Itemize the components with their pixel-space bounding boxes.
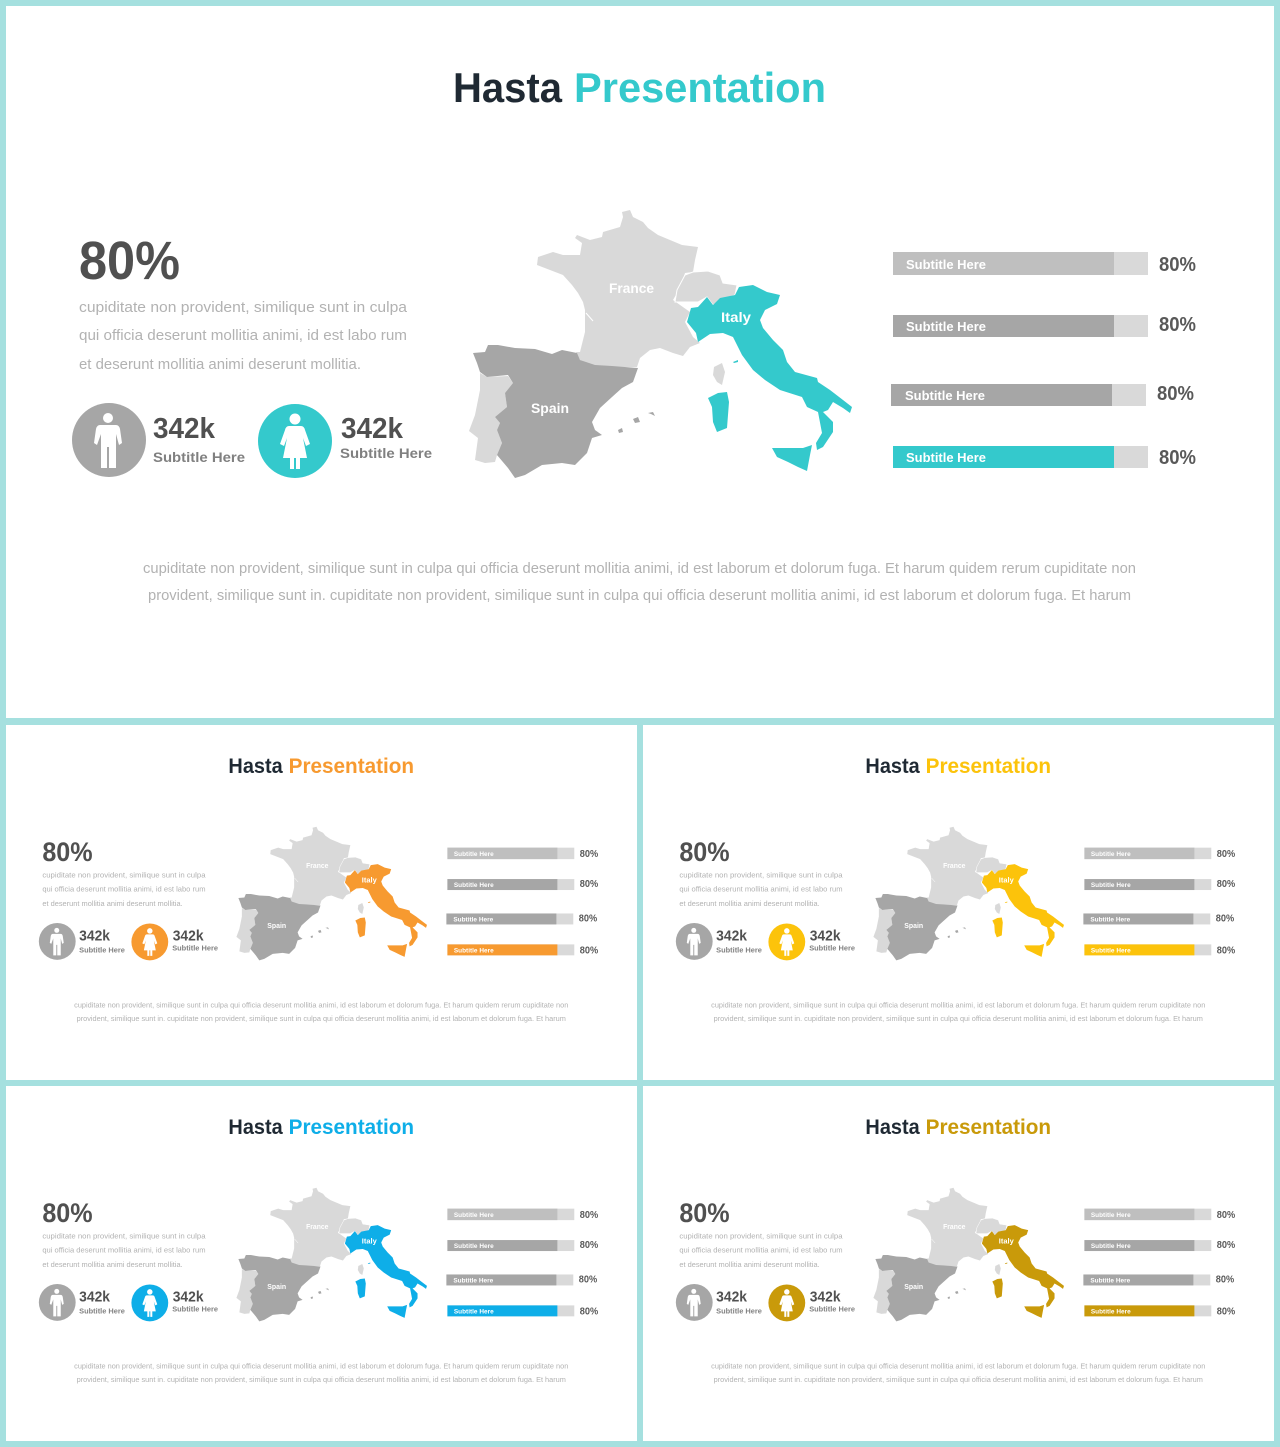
text block: intro: et deserunt mollitia animi deserunt mollitia. [79, 356, 361, 373]
stat: male: Subtitle Here [153, 449, 245, 465]
bar 1: Subtitle Here [454, 1212, 494, 1219]
map: France Spain Italy: Italy [362, 1239, 377, 1246]
map: France Spain Italy: Spain [267, 1284, 286, 1291]
map: France Spain Italy: Italy [999, 1239, 1014, 1246]
text block: intro: qui officia deserunt mollitia animi, id est labo rum [42, 1246, 206, 1255]
bar 4: Subtitle Here [454, 1308, 494, 1315]
stat: male: Subtitle Here [79, 947, 125, 954]
stat: male: 342k [79, 1289, 111, 1305]
bar 4: Subtitle Here [454, 947, 494, 954]
stat: male: 342k [716, 928, 748, 944]
bar 4: 80% [580, 1306, 598, 1317]
stat: male [39, 1284, 125, 1321]
bar 2: Subtitle Here [1091, 882, 1131, 889]
stat: female: 342k [173, 928, 204, 944]
text block: footer [143, 560, 1136, 604]
panel: blue slide [6, 1086, 637, 1441]
bar 4: 80% [1217, 945, 1235, 956]
map: France Spain Italy: Spain [904, 1284, 923, 1291]
stat: female: Subtitle Here [809, 945, 855, 952]
bar 4 [1084, 944, 1235, 956]
bar 1: 80% [1217, 849, 1235, 860]
bar 1: Subtitle Here [1091, 1212, 1131, 1219]
text block: footer: cupiditate non provident, similique sunt in culpa qui officia deserunt mollitia animi, id est laborum et dolorum fuga. Et harum quidem rerum cupiditate non [143, 560, 1136, 577]
title: Hasta [228, 1116, 283, 1139]
stat: female [768, 923, 855, 960]
text block: intro [42, 871, 206, 908]
text block: intro: et deserunt mollitia animi deserunt mollitia. [679, 899, 820, 908]
text block: intro: et deserunt mollitia animi deserunt mollitia. [679, 1260, 820, 1269]
map: France Spain Italy [236, 1188, 427, 1321]
bar 1 [1084, 848, 1235, 860]
stat: male [676, 923, 762, 960]
title [228, 1116, 414, 1139]
title: Presentation [926, 1116, 1051, 1139]
bar 2 [1084, 1240, 1235, 1251]
stat: female: 342k [810, 1289, 841, 1305]
bar 3: 80% [1216, 913, 1234, 924]
stat: male: 342k [716, 1289, 748, 1305]
stat: female: Subtitle Here [340, 445, 432, 461]
text block: intro [79, 299, 408, 373]
map: France Spain Italy: Spain [267, 923, 286, 930]
bar 2: Subtitle Here [454, 1243, 494, 1250]
big percentage: 80% [679, 1198, 730, 1228]
bar 4: 80% [1217, 1306, 1235, 1317]
bar 3: Subtitle Here [453, 1277, 494, 1284]
title: Presentation [574, 64, 826, 111]
title: Hasta [865, 755, 920, 778]
bar 2: 80% [1217, 879, 1235, 890]
map: France Spain Italy: Spain [531, 400, 569, 416]
bar 1 [893, 252, 1196, 276]
panel: orange slide [6, 725, 637, 1080]
map: France Spain Italy: France [306, 863, 329, 870]
text block: footer: provident, similique sunt in. cupiditate non provident, similique sunt in culpa qui officia deserunt mollitia animi, id est laborum et dolorum fuga. Et harum [714, 1014, 1203, 1023]
text block: intro: qui officia deserunt mollitia animi, id est labo rum [679, 1246, 843, 1255]
bar 3 [891, 383, 1194, 406]
bar 2 [893, 314, 1196, 337]
map: France Spain Italy: Italy [721, 309, 751, 325]
bar 1: Subtitle Here [454, 851, 494, 858]
bar 2: 80% [580, 1240, 598, 1251]
text block: footer: provident, similique sunt in. cupiditate non provident, similique sunt in culpa qui officia deserunt mollitia animi, id est laborum et dolorum fuga. Et harum [77, 1375, 566, 1384]
panel: yellow slide [643, 725, 1274, 1080]
stat: female [258, 404, 432, 478]
big percentage: 80% [79, 231, 180, 291]
bar 3: 80% [579, 1274, 597, 1285]
bar 1: 80% [1217, 1210, 1235, 1221]
bar 4: 80% [1159, 447, 1196, 469]
bar 4 [447, 1305, 598, 1317]
stat: male: Subtitle Here [716, 947, 762, 954]
text block: intro: qui officia deserunt mollitia animi, id est labo rum [79, 327, 407, 344]
stat: female: 342k [341, 413, 404, 445]
stat: male [39, 923, 125, 960]
text block: intro [679, 1232, 843, 1269]
bar 2: 80% [1217, 1240, 1235, 1251]
map: France Spain Italy [236, 827, 427, 960]
bar 2 [1084, 879, 1235, 890]
text block: footer [711, 1362, 1205, 1384]
map: France Spain Italy: France [306, 1224, 329, 1231]
text block: intro: cupiditate non provident, similique sunt in culpa [42, 871, 206, 880]
bar 1: 80% [580, 1210, 598, 1221]
text block: footer [711, 1001, 1205, 1023]
text block: intro: cupiditate non provident, similique sunt in culpa [679, 871, 843, 880]
text block: footer: provident, similique sunt in. cupiditate non provident, similique sunt in culpa qui officia deserunt mollitia animi, id est laborum et dolorum fuga. Et harum [714, 1375, 1203, 1384]
text block: intro: qui officia deserunt mollitia animi, id est labo rum [42, 885, 206, 894]
big percentage: 80% [679, 837, 730, 867]
bar 4 [1084, 1305, 1235, 1317]
text block: footer [74, 1001, 568, 1023]
stat: female [768, 1284, 855, 1321]
bar 4: Subtitle Here [1091, 947, 1131, 954]
stat: female: Subtitle Here [172, 1306, 218, 1313]
bar 2: 80% [580, 879, 598, 890]
text block: footer: cupiditate non provident, similique sunt in culpa qui officia deserunt mollitia animi, id est laborum et dolorum fuga. Et harum quidem rerum cupiditate non [711, 1001, 1205, 1010]
big percentage: 80% [42, 1198, 93, 1228]
bar 1: Subtitle Here [1091, 851, 1131, 858]
title [228, 755, 414, 778]
bar 4: 80% [580, 945, 598, 956]
text block: intro: et deserunt mollitia animi deserunt mollitia. [42, 899, 183, 908]
bar 3: Subtitle Here [1090, 916, 1131, 923]
bar 3 [446, 913, 597, 924]
text block: footer: cupiditate non provident, similique sunt in culpa qui officia deserunt mollitia animi, id est laborum et dolorum fuga. Et harum quidem rerum cupiditate non [74, 1362, 568, 1371]
panel: gold slide [643, 1086, 1274, 1441]
bar 4 [447, 944, 598, 956]
bar 2: Subtitle Here [906, 319, 986, 334]
big percentage: 80% [42, 837, 93, 867]
bar 2 [447, 879, 598, 890]
bar 1 [1084, 1209, 1235, 1221]
text block: footer: cupiditate non provident, similique sunt in culpa qui officia deserunt mollitia animi, id est laborum et dolorum fuga. Et harum quidem rerum cupiditate non [74, 1001, 568, 1010]
map: France Spain Italy: Italy [999, 878, 1014, 885]
bar 2: Subtitle Here [454, 882, 494, 889]
bar 2 [447, 1240, 598, 1251]
stat: male [72, 403, 245, 477]
bar 3 [1083, 1274, 1234, 1285]
title [865, 755, 1051, 778]
text block: footer: provident, similique sunt in. cupiditate non provident, similique sunt in culpa qui officia deserunt mollitia animi, id est laborum et dolorum fuga. Et harum [148, 587, 1131, 604]
stat: female: 342k [173, 1289, 204, 1305]
map: France Spain Italy [873, 827, 1064, 960]
bar 1 [447, 848, 598, 860]
map: France Spain Italy [469, 210, 852, 478]
bar 3: 80% [579, 913, 597, 924]
bar 3: 80% [1216, 1274, 1234, 1285]
text block: footer [74, 1362, 568, 1384]
title: Presentation [289, 1116, 414, 1139]
stat: male: Subtitle Here [716, 1308, 762, 1315]
map: France Spain Italy: Spain [904, 923, 923, 930]
stat: male [676, 1284, 762, 1321]
bar 3: Subtitle Here [453, 916, 494, 923]
bar 4: Subtitle Here [1091, 1308, 1131, 1315]
text block: intro: cupiditate non provident, similique sunt in culpa [42, 1232, 206, 1241]
text block: intro [679, 871, 843, 908]
text block: intro: cupiditate non provident, similique sunt in culpa [679, 1232, 843, 1241]
bar 3: Subtitle Here [1090, 1277, 1131, 1284]
stat: female [131, 1284, 218, 1321]
bar 3 [1083, 913, 1234, 924]
title [453, 64, 826, 111]
text block: intro: et deserunt mollitia animi deserunt mollitia. [42, 1260, 183, 1269]
stat: female: Subtitle Here [172, 945, 218, 952]
bar 4: Subtitle Here [906, 450, 986, 465]
stat: female [131, 923, 218, 960]
map: France Spain Italy: Italy [362, 878, 377, 885]
bar 3: 80% [1157, 383, 1194, 405]
stat: male: 342k [153, 413, 216, 445]
map: France Spain Italy [873, 1188, 1064, 1321]
map: France Spain Italy: France [609, 280, 654, 296]
map: France Spain Italy: France [943, 1224, 966, 1231]
bar 1 [447, 1209, 598, 1221]
bar 1: 80% [580, 849, 598, 860]
title: Hasta [453, 64, 563, 111]
title: Presentation [926, 755, 1051, 778]
text block: footer: cupiditate non provident, similique sunt in culpa qui officia deserunt mollitia animi, id est laborum et dolorum fuga. Et harum quidem rerum cupiditate non [711, 1362, 1205, 1371]
text block: intro [42, 1232, 206, 1269]
title: Hasta [228, 755, 283, 778]
title [865, 1116, 1051, 1139]
text block: intro: cupiditate non provident, similique sunt in culpa [79, 299, 408, 316]
bar 3 [446, 1274, 597, 1285]
map: France Spain Italy: France [943, 863, 966, 870]
title: Presentation [289, 755, 414, 778]
bar 1: Subtitle Here [906, 257, 986, 272]
stat: male: Subtitle Here [79, 1308, 125, 1315]
panel: main teal slide [6, 6, 1274, 718]
bar 2: Subtitle Here [1091, 1243, 1131, 1250]
bar 2: 80% [1159, 314, 1196, 336]
title: Hasta [865, 1116, 920, 1139]
stat: female: Subtitle Here [809, 1306, 855, 1313]
bar 3: Subtitle Here [905, 388, 985, 403]
text block: footer: provident, similique sunt in. cupiditate non provident, similique sunt in culpa qui officia deserunt mollitia animi, id est laborum et dolorum fuga. Et harum [77, 1014, 566, 1023]
stat: male: 342k [79, 928, 111, 944]
text block: intro: qui officia deserunt mollitia animi, id est labo rum [679, 885, 843, 894]
bar 4 [893, 446, 1196, 469]
bar 1: 80% [1159, 254, 1196, 276]
stat: female: 342k [810, 928, 841, 944]
